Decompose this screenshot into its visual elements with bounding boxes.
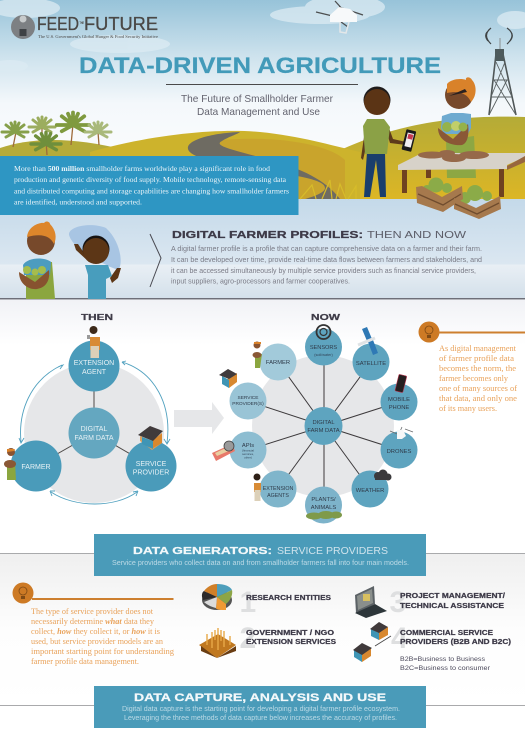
node: farmer [4, 440, 62, 492]
callout: farmer as data source: of its many users. [439, 404, 497, 413]
callout: farmer as data source: farmer becomes only [439, 374, 509, 383]
figure: man with phone [361, 86, 416, 197]
node: plants animals: PLANTS/ [311, 497, 336, 503]
subtitle [181, 93, 333, 118]
arrow: then to now [174, 402, 224, 434]
node: extension agent [68, 326, 120, 392]
item 1: research entities: RESEARCH ENTITIES [246, 595, 331, 602]
node: digital farm data [304, 407, 342, 445]
intro callout box: and distributed computing and storage capabilities are changing how smallholder farmers [14, 186, 289, 196]
node: extension agent: EXTENSION [74, 360, 114, 367]
banner: data capture, analysis and use: DATA CAPTURE, ANALYSIS AND USE [134, 692, 386, 704]
intro callout box: are identified, understood and supported. [14, 198, 142, 206]
subtitle: Data Management and Use [197, 106, 320, 118]
node: plants animals: ANIMALS [311, 505, 336, 511]
item 2: government ngo: EXTENSION SERVICES [246, 639, 336, 646]
node: digital farm data: FARM DATA [307, 428, 340, 434]
callout: service provider models [12, 582, 174, 666]
item 3: project management: PROJECT MANAGEMENT/ [400, 593, 505, 600]
node: extension agents: AGENTS [267, 493, 289, 499]
callout: service provider models: necessarily determine what data they [31, 617, 155, 626]
icon: agent [87, 326, 100, 358]
lower band background [0, 199, 525, 299]
crates of cabbage [416, 178, 501, 219]
node: service providers: PROVIDER(S) [232, 401, 264, 407]
node: service provider [126, 426, 176, 492]
node: extension agents [254, 470, 296, 508]
heading: digital farmer profiles: THEN AND NOW [367, 230, 467, 241]
callout: farmer as data source: that data, and only one [439, 394, 517, 403]
node: sensors: (soil/water) [314, 353, 334, 357]
node: farmer: FARMER [21, 464, 51, 471]
banner: data generators [94, 534, 426, 576]
node: farmer [252, 342, 296, 380]
header sky background [0, 0, 525, 199]
node: mobile phone [380, 374, 418, 420]
callout: service provider models: important starting point for understanding [31, 647, 174, 656]
node: extension agents: EXTENSION [263, 486, 293, 492]
callout: farmer as data source: As digital management [439, 344, 517, 353]
node: sensors [305, 325, 342, 366]
node: drones [380, 427, 418, 468]
icon: chevron [150, 234, 161, 287]
icon: farmer [4, 448, 16, 480]
node: apis [212, 432, 266, 468]
node: digital farm data [68, 408, 120, 458]
landscape hills [0, 117, 525, 199]
callout: service provider models: used, but service provider models are an [31, 637, 163, 646]
item 2: government ngo: GOVERNMENT / NGO [246, 630, 335, 637]
banner: data generators: SERVICE PROVIDERS [277, 545, 388, 557]
icon: crop field [199, 628, 236, 658]
node: service providers: SERVICE [238, 395, 258, 401]
node: digital farm data: FARM DATA [74, 435, 114, 442]
diagram: now [212, 312, 418, 524]
icon: trees [2, 112, 111, 155]
item 1: research entities [202, 584, 331, 619]
node: sensors: SENSORS [310, 345, 337, 351]
logo: Feed the Future: The U.S. Government's Global Hunger & Food Security Initiative [38, 34, 158, 39]
icon: connected buildings [353, 622, 391, 662]
node: satellite: SATELLITE [356, 361, 386, 367]
node: drones: DRONES [387, 449, 412, 455]
node: apis: services, [242, 452, 254, 456]
figure: man with sack [69, 225, 121, 299]
node: mobile phone: MOBILE [388, 397, 410, 403]
item 3: project management [355, 586, 505, 619]
logo: Feed the Future: FUTURE [84, 14, 158, 34]
arrows: cycle [19, 361, 170, 504]
icon: pie chart [202, 584, 232, 610]
banner: data capture, analysis and use [94, 686, 426, 728]
intro callout box [0, 156, 298, 215]
title: DATA-DRIVEN AGRICULTURE [79, 53, 441, 78]
node: farmer: FARMER [266, 360, 290, 366]
icon: US seal [11, 15, 35, 39]
intro callout box: More than 500 million smallholder farms worldwide play a significant role in food [14, 164, 270, 173]
heading: now: NOW [311, 312, 341, 322]
callout: service provider models: The type of service provider does not [31, 607, 154, 616]
figure: woman with cabbages [438, 77, 476, 178]
node: extension agent: AGENT [82, 369, 107, 376]
item 4: commercial service providers: B2B=Business to Business [400, 656, 486, 663]
banner: data generators: DATA GENERATORS: [133, 545, 272, 557]
heading: digital farmer profiles [172, 230, 467, 241]
text: profile description: input suppliers, agro-processors and farmer cooperatives. [171, 276, 350, 286]
icon: lightbulb [12, 582, 34, 604]
text: profile description: A digital farmer profile is a profile that can capture comprehensive data on a farmer and their farm. [171, 244, 482, 253]
node: apis: APIs [242, 443, 254, 449]
node: mobile phone: PHONE [389, 405, 409, 411]
item 3: project management: 3 [390, 586, 406, 619]
callout: service provider models: collect, how they collect it, or how it is [31, 627, 160, 636]
node: service provider: PROVIDER [133, 470, 169, 476]
banner: data capture, analysis and use: Leveraging the three methods of data capture below increases the accuracy of profiles. [124, 715, 397, 722]
item 3: project management: TECHNICAL ASSISTANCE [400, 603, 504, 610]
intro callout box: production and genetic diversity of food supply. Mobile technology, remote-sensing data [14, 175, 287, 184]
item 4: commercial service providers: B2C=Business to consumer [400, 665, 491, 672]
heading: digital farmer profiles: DIGITAL FARMER PROFILES: [172, 230, 363, 241]
node: digital farm data: DIGITAL [81, 426, 107, 433]
node: plants animals [305, 486, 342, 524]
diagram: then [4, 312, 176, 504]
text: profile description [171, 244, 482, 286]
item 4: commercial service providers [353, 622, 511, 672]
figure: woman [19, 221, 56, 299]
panel: data generators background [0, 553, 525, 706]
panel: then and now background [0, 300, 525, 345]
table with yams [398, 150, 525, 197]
node: service providers [219, 369, 266, 420]
item 2: government ngo: 2 [240, 622, 256, 655]
icon: cell tower with signal [486, 28, 516, 115]
node: satellite [352, 327, 390, 380]
icon: laptop [355, 586, 387, 618]
text: profile description: it can be accessed simultaneously by multiple service providers such as financial service providers, [171, 266, 476, 275]
node: service provider: SERVICE [136, 461, 167, 468]
banner: data capture, analysis and use: Digital data capture is the starting point for developing a digital farmer profile ecosystem. [122, 706, 400, 713]
logo: Feed the Future: THE [80, 21, 84, 25]
subtitle: The Future of Smallholder Farmer [181, 93, 333, 105]
item 1: research entities: 1 [240, 586, 256, 619]
banner: data generators: Service providers who collect data on and from smallholder farmers fall into four main models. [112, 560, 409, 567]
node: weather [352, 470, 392, 508]
callout: service provider models: farmer profile data management. [31, 657, 139, 666]
item 2: government ngo [199, 622, 336, 658]
text: profile description: It can be developed over time, provide real-time data flows between farmers and stakeholders, and [171, 255, 482, 264]
icon: building [138, 426, 163, 450]
node: apis: other) [244, 456, 252, 460]
logo: Feed the Future [11, 14, 158, 39]
heading: then: THEN [81, 312, 113, 322]
node: apis: (financial [242, 448, 254, 452]
node: digital farm data: DIGITAL [312, 420, 335, 426]
logo: Feed the Future: FEED [37, 14, 79, 34]
icon: drone [316, 1, 363, 33]
item 4: commercial service providers: PROVIDERS (B2B AND B2C) [400, 639, 511, 646]
panel: digital farmer profiles [0, 221, 525, 300]
item 4: commercial service providers: COMMERCIAL SERVICE [400, 630, 493, 637]
callout: farmer as data source [418, 322, 525, 413]
node: weather: WEATHER [356, 488, 384, 494]
callout: farmer as data source: of farmer profile data [439, 354, 514, 363]
callout: farmer as data source: one of many sources of [439, 384, 517, 393]
icon: lightbulb [418, 322, 440, 342]
callout: farmer as data source: becomes the norm, the [439, 364, 516, 373]
item 4: commercial service providers: 4 [391, 622, 408, 655]
